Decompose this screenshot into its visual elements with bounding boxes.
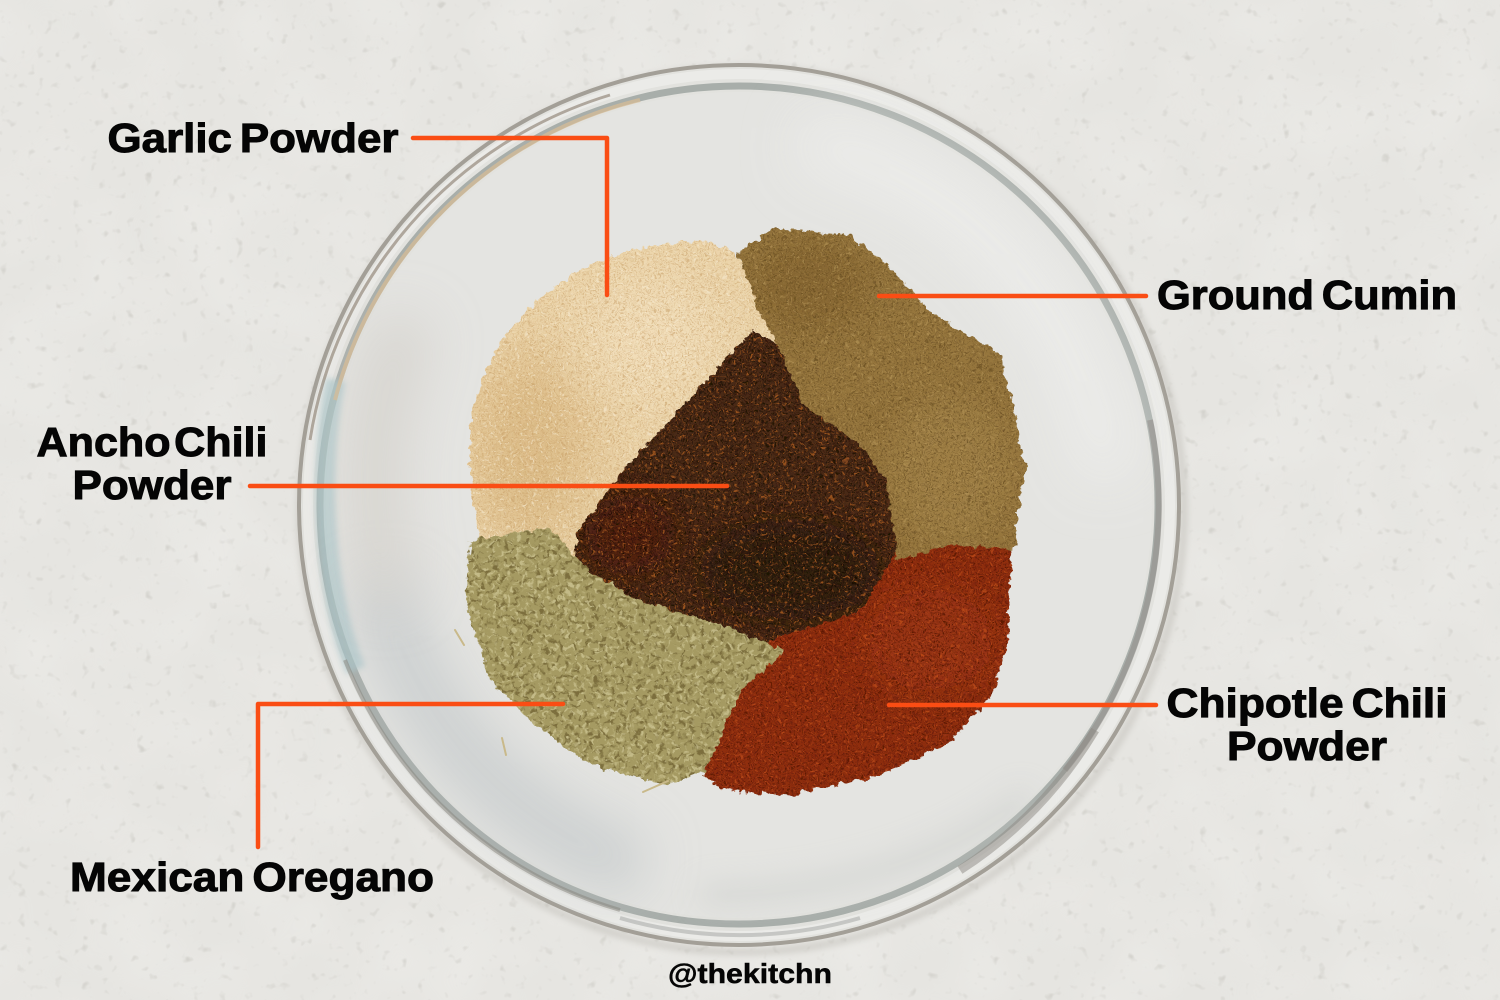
label: chipotle chili powder: Powder — [1227, 723, 1387, 769]
bright glass: upper right — [800, 140, 1110, 480]
shaded glass: lower left — [380, 580, 640, 870]
label: garlic powder: Garlic Powder — [108, 115, 399, 161]
leader line: garlic powder — [413, 138, 607, 295]
spice: mexican oregano — [465, 528, 785, 785]
warm rim reflections — [310, 95, 610, 440]
stray oregano flakes — [455, 630, 668, 792]
label: mexican oregano: Mexican Oregano — [70, 854, 434, 900]
glass bowl — [299, 65, 1184, 952]
spice: ground cumin — [730, 220, 1035, 560]
label: ancho chili powder: Ancho Chili — [36, 419, 268, 465]
blue glass tint: left — [325, 380, 356, 670]
leader line: ground cumin — [879, 294, 1146, 298]
spice: garlic powder — [467, 240, 776, 556]
label: chipotle chili powder: Chipotle Chili — [1166, 680, 1448, 726]
spice: chipotle chili powder — [702, 544, 1013, 797]
leader line: chipotle chili powder — [889, 703, 1156, 707]
leader line: ancho chili powder — [250, 484, 727, 488]
label: ancho chili powder: Powder — [72, 462, 232, 508]
leader line: mexican oregano — [258, 704, 563, 847]
label: ground cumin: Ground Cumin — [1157, 272, 1457, 318]
spice: ancho chili powder — [574, 329, 898, 642]
credit: thekitchn handle: @thekitchn — [668, 958, 832, 989]
